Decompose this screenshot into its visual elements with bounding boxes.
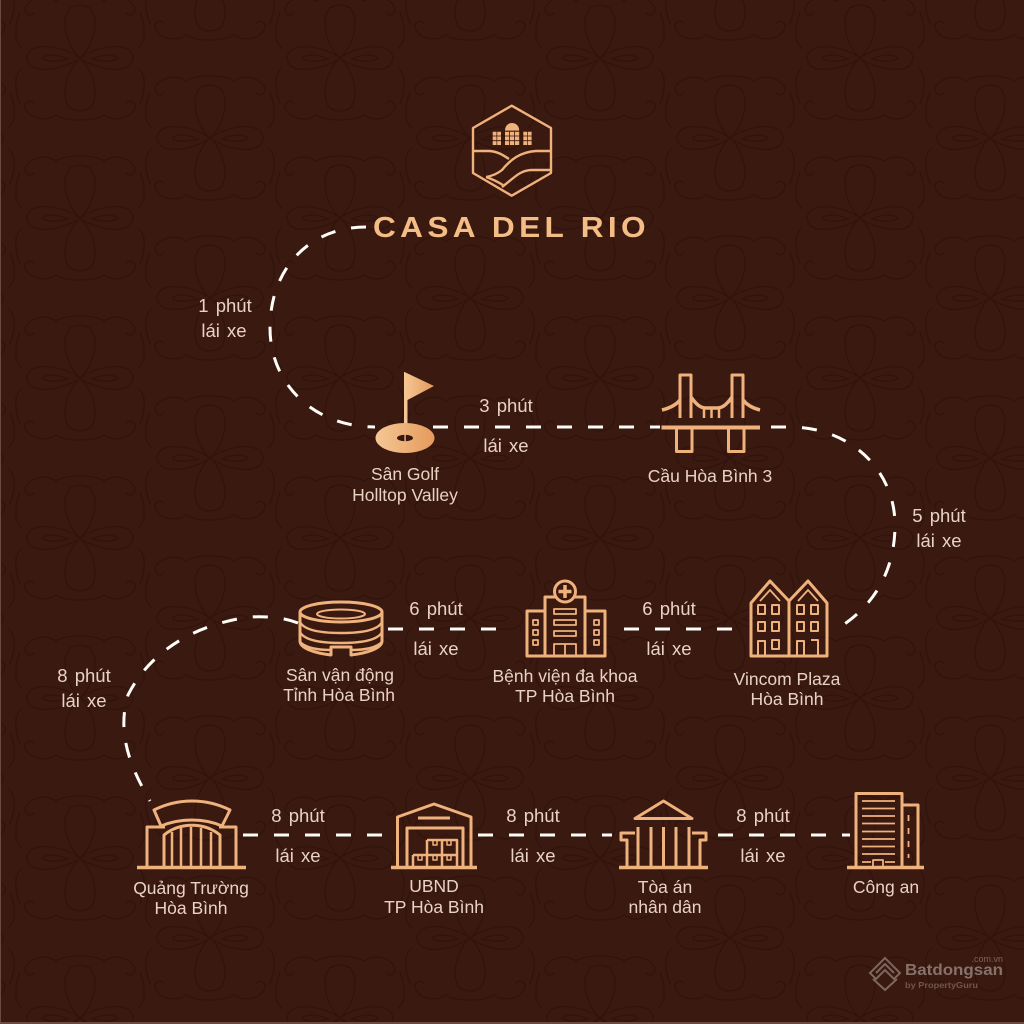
icon: square	[137, 801, 246, 868]
leg label: 6 phút left: 6 phút	[409, 598, 463, 619]
leg label: 8 phút left	[57, 665, 111, 711]
leg label: 6 phút left	[409, 598, 463, 659]
label: UBND: UBND	[409, 876, 459, 896]
label: bridge: Cầu Hòa Bình 3	[648, 466, 772, 486]
label: vincom: Hòa Bình	[751, 689, 823, 709]
label: stadium: Sân vận động	[286, 665, 394, 685]
leg label: 8 phút 2: lái xe	[510, 845, 556, 866]
watermark: by PropertyGuru	[905, 980, 978, 990]
label: stadium	[283, 665, 395, 705]
label: golf: Sân Golf	[371, 464, 439, 484]
icon: court	[619, 801, 708, 868]
icon: golf	[376, 372, 434, 453]
leg label: 6 phút right	[642, 598, 696, 659]
label: court	[628, 877, 702, 917]
leg label: 1 phút	[198, 295, 252, 341]
label: square	[133, 878, 249, 918]
label: hospital: TP Hòa Bình	[515, 686, 615, 706]
leg label: 5 phút	[912, 505, 966, 551]
label: court: nhân dân	[628, 897, 702, 917]
leg label: 3 phút: 3 phút	[479, 395, 533, 416]
leg label: 5 phút: lái xe	[916, 530, 962, 551]
leg label: 8 phút left: lái xe	[61, 690, 107, 711]
leg label: 1 phút: lái xe	[201, 320, 247, 341]
leg label: 6 phút right: 6 phút	[642, 598, 696, 619]
icon: UBND warehouse	[391, 804, 477, 868]
watermark	[870, 954, 1003, 990]
icon: police building	[847, 794, 924, 868]
label: UBND	[384, 876, 484, 917]
icon: stadium	[300, 602, 382, 655]
label: hospital	[493, 666, 638, 706]
label: hospital: Bệnh viện đa khoa	[493, 666, 638, 686]
leg label: 8 phút 1	[271, 805, 325, 866]
label: police: Công an	[853, 877, 919, 897]
label: court: Tòa án	[638, 877, 692, 897]
label: UBND: TP Hòa Bình	[384, 897, 484, 917]
leg label: 3 phút	[479, 395, 533, 456]
label: stadium: Tỉnh Hòa Bình	[283, 685, 395, 705]
label: vincom	[734, 669, 841, 709]
label: vincom: Vincom Plaza	[734, 669, 841, 689]
leg label: 8 phút 3: 8 phút	[736, 805, 790, 826]
label: golf	[352, 464, 458, 505]
leg label: 8 phút 1: 8 phút	[271, 805, 325, 826]
leg label: 5 phút: 5 phút	[912, 505, 966, 526]
label: square: Quảng Trường	[133, 878, 249, 898]
watermark: .com.vn	[971, 954, 1003, 964]
title: CASA DEL RIO	[373, 212, 650, 244]
leg label: 1 phút: 1 phút	[198, 295, 252, 316]
route line	[124, 227, 895, 835]
leg label: 6 phút right: lái xe	[646, 638, 692, 659]
leg label: 6 phút left: lái xe	[413, 638, 459, 659]
leg label: 8 phút 3	[736, 805, 790, 866]
leg label: 8 phút left: 8 phút	[57, 665, 111, 686]
watermark: Batdongsan	[905, 962, 1003, 979]
label: square: Hòa Bình	[155, 898, 227, 918]
label: golf: Holltop Valley	[352, 485, 458, 505]
icon: bridge	[662, 375, 760, 452]
leg label: 8 phút 1: lái xe	[275, 845, 321, 866]
icon: hospital	[527, 581, 605, 656]
leg label: 3 phút: lái xe	[483, 435, 529, 456]
logo icon	[473, 106, 551, 196]
leg label: 8 phút 2	[506, 805, 560, 866]
leg label: 8 phút 3: lái xe	[740, 845, 786, 866]
icon: vincom	[751, 581, 827, 656]
leg label: 8 phút 2: 8 phút	[506, 805, 560, 826]
